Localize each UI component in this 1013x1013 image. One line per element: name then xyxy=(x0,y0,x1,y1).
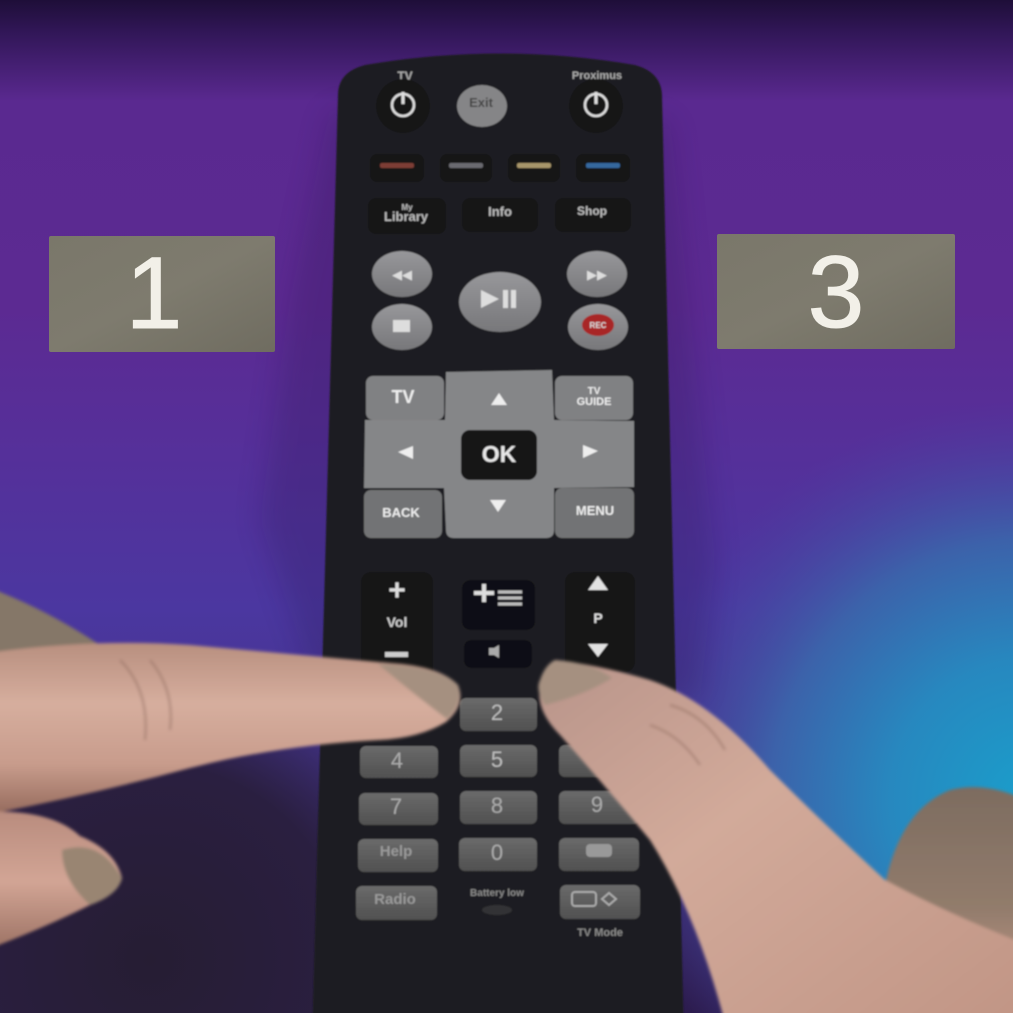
playback buttons: REC xyxy=(590,321,607,330)
label: number 1 xyxy=(49,236,275,352)
remote body xyxy=(312,54,684,1013)
number keys: 7 xyxy=(390,794,402,819)
navigation pad: BACK xyxy=(382,505,420,520)
number keys: 0 xyxy=(491,840,503,865)
number keys: 4 xyxy=(391,748,403,773)
label: number 1: 1 xyxy=(126,236,182,350)
label: number 3: 3 xyxy=(808,235,864,349)
library info shop buttons xyxy=(368,198,631,234)
library info shop buttons: My xyxy=(401,203,413,212)
number keys: TV Mode xyxy=(577,927,623,939)
number keys: Help xyxy=(380,843,412,860)
number keys: 9 xyxy=(591,792,603,817)
library info shop buttons: Shop xyxy=(577,204,607,218)
power and exit buttons: Exit xyxy=(469,95,494,110)
number keys: 5 xyxy=(491,747,503,772)
colour buttons xyxy=(370,154,630,182)
label: number 3 xyxy=(717,234,955,349)
number keys: 8 xyxy=(491,793,503,818)
number keys: Radio xyxy=(374,891,416,908)
playback buttons: ▶▶ xyxy=(587,267,607,282)
power and exit buttons xyxy=(376,69,623,133)
programme rocker: P xyxy=(593,610,603,626)
channel list and mute buttons xyxy=(462,580,535,668)
number keys: Battery low xyxy=(470,888,524,899)
volume rocker: Vol xyxy=(387,614,407,630)
number keys xyxy=(356,698,640,939)
playback buttons: ◀◀ xyxy=(392,267,412,282)
library info shop buttons: Info xyxy=(488,204,512,219)
power and exit buttons: TV xyxy=(397,69,413,83)
power and exit buttons: Proximus xyxy=(572,70,622,82)
navigation pad: GUIDE xyxy=(577,396,611,408)
navigation pad: TV xyxy=(588,386,601,397)
number keys: 2 xyxy=(491,700,503,725)
playback buttons xyxy=(372,251,628,350)
navigation pad: TV xyxy=(391,387,415,407)
navigation pad: MENU xyxy=(576,503,614,518)
remote control xyxy=(312,54,684,1013)
volume rocker xyxy=(361,572,433,682)
navigation pad: OK xyxy=(482,441,517,467)
library info shop buttons: Library xyxy=(384,209,429,224)
navigation pad xyxy=(364,370,634,538)
volume rocker: + xyxy=(388,574,406,607)
hand: right with pointing finger xyxy=(538,660,1013,1013)
programme rocker xyxy=(565,572,635,672)
hand: left with pointing finger xyxy=(0,582,460,952)
